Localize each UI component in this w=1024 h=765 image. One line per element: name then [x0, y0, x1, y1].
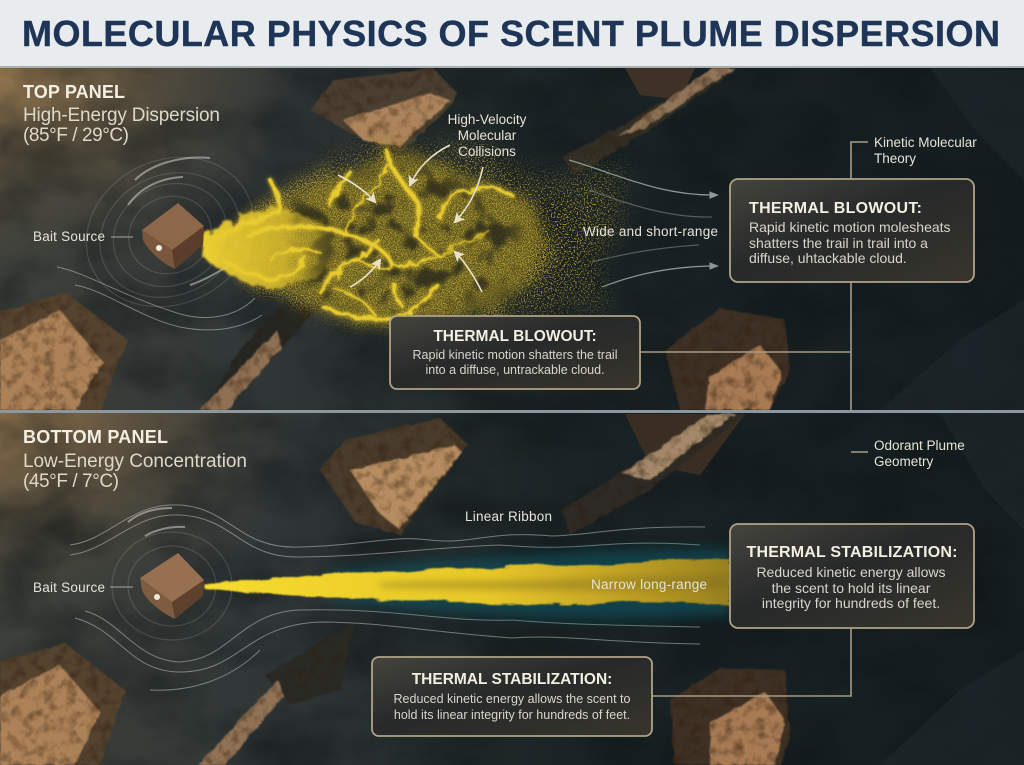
teal halo: [330, 550, 730, 618]
callout: thermal stabilization right: the scent to hold its linear: [772, 580, 931, 596]
label: bait source: Bait Source: [33, 229, 105, 244]
callout: thermal blowout right: diffuse, uhtackable cloud.: [749, 250, 907, 266]
rock: lower left: [0, 292, 128, 410]
label: kinetic molecular theory: Kinetic Molecular: [874, 135, 977, 150]
callout: thermal stabilization right: [730, 524, 974, 628]
collision arrows: [338, 145, 483, 292]
rock behind upper log: [625, 414, 745, 475]
bright plume veins: [205, 150, 512, 320]
callout: thermal blowout centre: [390, 316, 640, 389]
bait cube bottom: [140, 553, 204, 619]
callout: thermal stabilization centre: THERMAL STABILIZATION:: [412, 671, 612, 688]
label: odorant plume geometry: Odorant Plume: [874, 438, 965, 453]
bottom panel heading: (45°F / 7°C): [23, 471, 119, 492]
callout: thermal stabilization right: THERMAL STABILIZATION:: [746, 544, 958, 561]
label: bait source bottom: Bait Source: [33, 580, 105, 595]
bright plume exit: [203, 208, 340, 289]
divider between panels: [0, 410, 1024, 413]
rocks and logs in bottom panel: [0, 414, 790, 765]
callout: thermal blowout centre: Rapid kinetic motion shatters the trail: [413, 348, 617, 362]
label: odorant plume geometry: Geometry: [874, 454, 934, 469]
label: linear ribbon: Linear Ribbon: [465, 509, 552, 524]
dark mottled pockets: [270, 165, 520, 315]
connector: top panel: [640, 142, 868, 524]
callout: thermal blowout right: Rapid kinetic motion molesheats: [749, 219, 951, 235]
log: lower centre: [198, 622, 355, 765]
wide gray flow arrows: [569, 160, 717, 287]
log: upper right: [562, 414, 745, 535]
rock behind upper log: [625, 68, 695, 100]
callout: thermal stabilization right: integrity for hundreds of feet.: [762, 595, 940, 611]
log: lower centre: [200, 300, 320, 410]
yellow scent cloud: [203, 135, 640, 335]
callout: thermal blowout centre: into a diffuse, untrackable cloud.: [425, 363, 605, 377]
rocks and logs in top panel: [0, 68, 790, 410]
connector: bottom panel: [652, 452, 868, 696]
bottom panel: low-energy concentration: [0, 413, 1024, 765]
bottom panel background: [0, 413, 1024, 765]
rock: top centre: [320, 418, 468, 535]
ribbon inner shading: [380, 575, 730, 591]
callout: thermal blowout centre: THERMAL BLOWOUT:: [433, 328, 597, 345]
top panel heading: (85°F / 29°C): [23, 125, 129, 146]
narrow ribbon plume: [204, 550, 730, 618]
dense grain body: [225, 152, 542, 327]
callout: thermal blowout right: [730, 179, 974, 282]
callout: thermal stabilization centre: hold its linear integrity for hundreds of feet.: [394, 708, 630, 722]
streamlines: [70, 505, 705, 690]
rock: top centre: [310, 68, 457, 153]
rock: lower left: [0, 643, 125, 765]
water ripples around bottom bait: [112, 508, 232, 640]
bait cube: [142, 203, 204, 269]
callout: thermal blowout right: shatters the trail in trail into a: [749, 235, 928, 251]
olive base: [235, 154, 540, 325]
water ripples around bait: [57, 130, 278, 334]
bottom panel heading: Low-Energy Concentration: [23, 451, 247, 472]
rock: lower right: [665, 308, 790, 410]
yellow ribbon: [204, 558, 730, 604]
top panel background: [0, 68, 1024, 410]
header bar with title: [0, 0, 1024, 68]
bottom panel heading: [23, 427, 247, 492]
callout: thermal stabilization centre: [372, 657, 652, 736]
top panel heading: High-Energy Dispersion: [23, 105, 220, 126]
label: high-velocity molecular collisions: Molecular: [458, 128, 517, 143]
top panel: high-energy dispersion: [0, 68, 1024, 410]
label: high-velocity molecular collisions: High-Velocity: [448, 112, 527, 127]
label: high-velocity molecular collisions: Collisions: [458, 144, 516, 159]
bottom panel heading: BOTTOM PANEL: [23, 427, 168, 447]
top panel heading: TOP PANEL: [23, 82, 125, 102]
label: narrow long-range: Narrow long-range: [591, 577, 707, 592]
callout: thermal blowout right: THERMAL BLOWOUT:: [749, 200, 922, 217]
callout: thermal stabilization right: Reduced kinetic energy allows: [756, 564, 946, 580]
rock: lower right: [670, 668, 790, 765]
label: wide and short-range: Wide and short-range: [583, 224, 718, 239]
sparse grain halo: [300, 135, 640, 335]
header bar with title: MOLECULAR PHYSICS OF SCENT PLUME DISPERSION: [22, 13, 1000, 54]
callout: thermal stabilization centre: Reduced kinetic energy allows the scent to: [394, 692, 631, 706]
label: kinetic molecular theory: Theory: [874, 151, 916, 166]
top panel heading: [23, 82, 220, 146]
log: upper right: [562, 68, 738, 175]
